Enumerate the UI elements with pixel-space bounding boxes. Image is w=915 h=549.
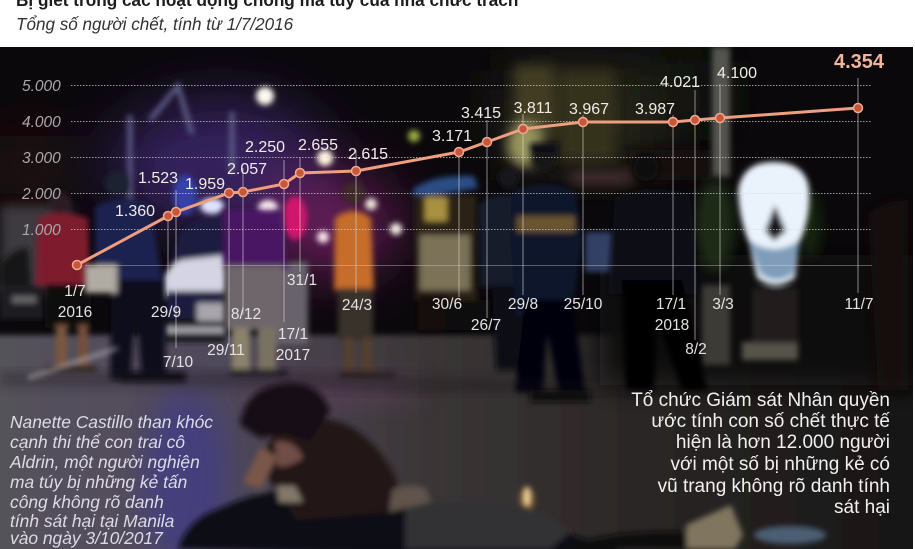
photo caption: cạnh thi thể con trai cô <box>10 432 185 452</box>
value labels: 3.987 <box>635 101 675 118</box>
date labels: 29/9 <box>151 304 181 321</box>
person: orange shirt <box>334 182 395 378</box>
date labels: 30/6 <box>432 296 462 313</box>
police lights <box>173 175 307 240</box>
photo caption: vào ngày 3/10/2017 <box>10 528 164 548</box>
data line <box>77 108 858 265</box>
date labels: 31/1 <box>287 272 317 289</box>
background car left <box>0 248 45 320</box>
date labels: 11/7 <box>844 296 874 313</box>
date labels: 26/7 <box>471 317 501 334</box>
police car <box>162 217 226 342</box>
date labels: 2016 <box>58 304 92 321</box>
value labels: 4.021 <box>660 74 700 91</box>
police officers <box>478 143 707 402</box>
callout: human rights watch estimate <box>631 390 890 518</box>
date labels: 1/7 <box>64 283 86 300</box>
callout: human rights watch estimate: với một số bị những kẻ có <box>670 454 890 475</box>
photo caption: ma túy bị những kẻ tấn <box>10 472 187 492</box>
callout: human rights watch estimate: Tổ chức Giám sát Nhân quyền <box>631 390 890 411</box>
value labels: 4.354 <box>834 51 885 73</box>
background pickup <box>262 262 308 344</box>
jeepney <box>412 176 490 330</box>
date labels: 2017 <box>276 347 310 364</box>
callout: human rights watch estimate: hiện là hơn 12.000 người <box>676 432 890 453</box>
value labels: 3.967 <box>569 101 609 118</box>
photo caption <box>9 412 213 548</box>
sign structure <box>130 86 232 205</box>
subtitle: Tổng số người chết, tính từ 1/7/2016 <box>16 15 294 34</box>
pole <box>712 47 730 177</box>
photo caption: Aldrin, một người nghiện <box>9 452 200 472</box>
blue patch <box>585 232 615 272</box>
date labels: 29/8 <box>508 296 538 313</box>
date labels: 2018 <box>655 317 689 334</box>
photo caption: công không rõ danh <box>10 492 164 512</box>
photo caption: tính sát hại tại Manila <box>10 511 175 531</box>
value labels: 4.100 <box>717 65 757 82</box>
axis labels: 5.000 <box>22 78 61 95</box>
line chart <box>21 51 885 371</box>
date labels: 7/10 <box>163 354 193 371</box>
date labels: 3/3 <box>712 296 734 313</box>
foliage <box>695 179 735 271</box>
axis labels: 1.000 <box>22 222 61 239</box>
date labels: 25/10 <box>564 296 603 313</box>
callout: human rights watch estimate: sát hại <box>834 497 890 518</box>
date labels: 17/1 <box>278 326 308 343</box>
callout: human rights watch estimate: vũ trang không rõ danh tính <box>658 476 890 497</box>
value labels: 2.615 <box>348 146 388 163</box>
value labels: 1.360 <box>115 203 155 220</box>
person: grey and purple <box>222 210 288 376</box>
value labels: 1.959 <box>185 176 225 193</box>
body and woman <box>178 383 743 549</box>
date labels: 8/12 <box>231 306 261 323</box>
puddle <box>754 526 826 544</box>
road <box>0 335 915 549</box>
photo caption: Nanette Castillo than khóc <box>10 412 213 432</box>
value labels: 1.523 <box>138 170 178 187</box>
callout: human rights watch estimate: ước tính con số chết thực tế <box>651 411 890 432</box>
sky glow <box>0 60 720 275</box>
value labels <box>115 51 885 220</box>
date labels: 17/1 <box>656 296 686 313</box>
axis labels: 3.000 <box>22 150 61 167</box>
date labels <box>58 272 874 371</box>
yellow building <box>507 65 710 184</box>
axis labels: 2.000 <box>21 186 61 203</box>
right figure <box>868 200 908 390</box>
axis labels: 4.000 <box>22 114 61 131</box>
date labels: 8/2 <box>685 341 707 358</box>
left wall <box>0 205 70 295</box>
date labels: 24/3 <box>342 297 372 314</box>
date labels: 29/11 <box>207 342 245 359</box>
value labels: 3.415 <box>461 105 501 122</box>
grotto and statue <box>702 162 809 365</box>
value labels: 2.655 <box>298 137 338 154</box>
shadows on road <box>0 372 700 392</box>
value labels: 3.171 <box>432 128 472 145</box>
street lamps <box>256 87 420 243</box>
data points <box>72 104 862 270</box>
value labels: 2.057 <box>227 161 267 178</box>
person: red shirt <box>35 192 97 372</box>
value labels: 3.811 <box>514 100 553 117</box>
person: plain-clothes officer <box>85 171 186 382</box>
candle <box>519 486 535 514</box>
leader lines <box>168 78 858 348</box>
road purple glow <box>143 390 227 549</box>
axis labels <box>21 78 61 239</box>
value labels: 2.250 <box>245 139 285 156</box>
